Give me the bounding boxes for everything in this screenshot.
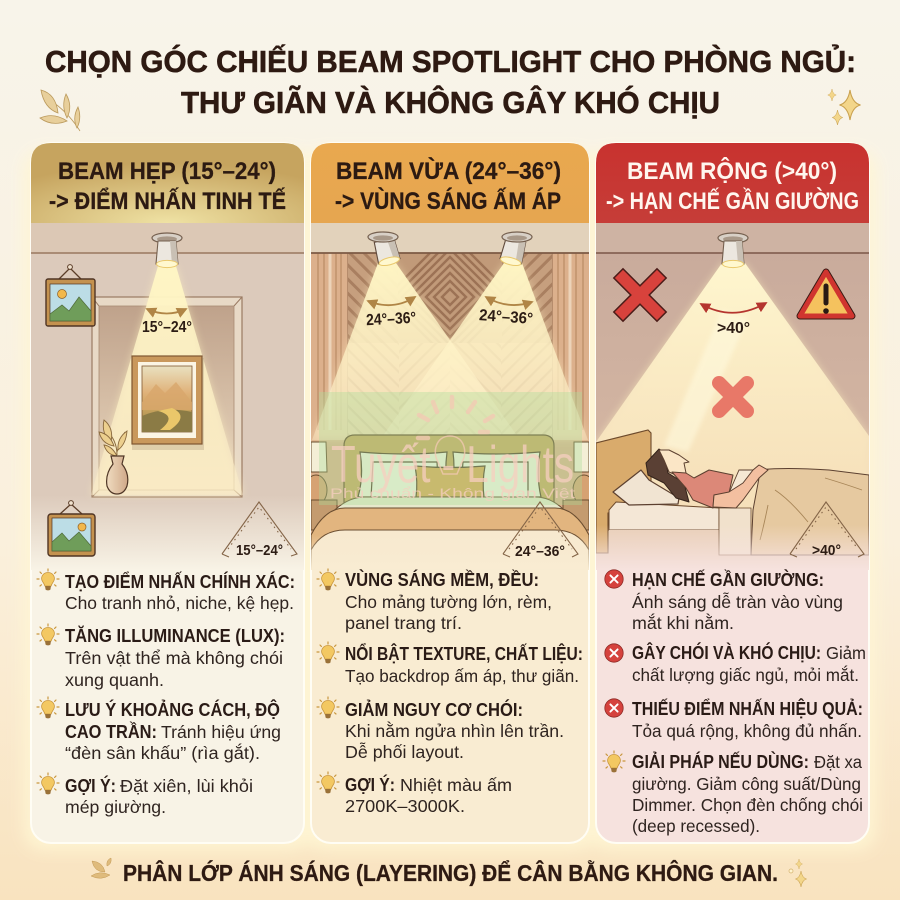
- angle label right: 24°–36°: [479, 307, 534, 328]
- bullet: near bed: mắt khi nằm.: [632, 612, 734, 633]
- angle label: narrow: 15°–24°: [142, 319, 192, 336]
- bullet: soft area: Cho mảng tường lớn, rèm,: [345, 592, 552, 612]
- bullet: solution: (deep recessed).: [632, 816, 760, 836]
- wide light beam: [596, 263, 869, 506]
- wall niche: [92, 297, 242, 497]
- bullet: illuminance: Trên vật thể mà không chói: [65, 648, 283, 668]
- bullet: accent: [37, 569, 295, 613]
- watermark band: [319, 392, 582, 505]
- watermark logo: [330, 397, 575, 501]
- bullet: no accent: Tỏa quá rộng, không đủ nhấn.: [632, 721, 862, 741]
- watermark logo: Tuyết - Lights: [331, 436, 574, 494]
- header: narrow beam: [31, 143, 304, 223]
- header: narrow beam: -> ĐIỂM NHẤN TINH TẾ: [49, 187, 286, 215]
- bullet: soft area: [317, 569, 552, 633]
- ruler triangle: wide: [790, 502, 864, 559]
- bullet: tip narrow: Đặt xiên, lùi khỏi: [120, 776, 253, 796]
- header: wide beam: BEAM RỘNG (>40°): [627, 157, 837, 185]
- bed headboard: [344, 435, 554, 510]
- mattress: [609, 502, 719, 560]
- bullet: distance: [37, 697, 281, 763]
- illustration: person in bed under wide beam: [596, 223, 869, 570]
- spotlight: [718, 233, 748, 268]
- bedside lamp left: [311, 442, 338, 530]
- title: THƯ GIÃN VÀ KHÔNG GÂY KHÓ CHỊU: [181, 84, 720, 120]
- bullet: near bed: HẠN CHẾ GẦN GIƯỜNG:: [632, 569, 824, 590]
- bullet: tip medium: 2700K–3000K.: [345, 796, 465, 816]
- icon: picture bottom: [48, 501, 95, 556]
- icon: leaf sprig: [40, 90, 80, 131]
- header: narrow beam: BEAM HẸP (15°–24°): [58, 158, 276, 185]
- bullet: tip narrow: GỢI Ý:: [65, 775, 116, 796]
- bullet: solution: GIẢI PHÁP NẾU DÙNG:: [632, 751, 809, 772]
- panel: medium beam: [305, 143, 595, 843]
- duvet: [311, 497, 589, 570]
- blanket: [751, 468, 869, 555]
- bullet: tip medium: GỢI Ý:: [345, 774, 395, 795]
- bullet: discomfort: [605, 642, 866, 685]
- bullet: solution: [603, 751, 863, 836]
- watermark logo: Phủ chuẩn - Không gian Việt: [330, 485, 575, 501]
- bullet: discomfort: GÂY CHÓI VÀ KHÓ CHỊU:: [632, 642, 821, 663]
- spotlight left: [368, 232, 401, 267]
- beam glow: [91, 266, 243, 495]
- bullet: discomfort: Giảm: [826, 643, 866, 663]
- angle arrow left: [368, 297, 415, 305]
- vase with leaves: [99, 420, 128, 494]
- icon: faded cross: [719, 383, 747, 411]
- icon: red cross left: [623, 278, 657, 312]
- sheet fold: [729, 470, 754, 493]
- bullet: tip medium: Nhiệt màu ấm: [400, 775, 512, 795]
- ruler triangle: medium: 24°–36°: [515, 543, 565, 560]
- light beam left: [312, 263, 520, 440]
- beam glow: [312, 263, 588, 440]
- pillow: [613, 470, 679, 505]
- framed painting: [132, 356, 204, 450]
- illustration: bedroom headboard wall: [305, 223, 595, 570]
- hair: [646, 449, 689, 502]
- pillows: [358, 452, 541, 498]
- bullet: texture: [317, 642, 583, 686]
- ruler triangle: wide: >40°: [812, 542, 841, 559]
- bullet: discomfort: chất lượng giấc ngủ, mỏi mắt.: [632, 664, 859, 685]
- bullet: distance: “đèn sân khấu” (rìa gắt).: [65, 742, 260, 763]
- ruler triangle: narrow: 15°–24°: [236, 542, 283, 559]
- bullet: soft area: VÙNG SÁNG MỀM, ĐỀU:: [345, 569, 539, 590]
- bullet: illuminance: xung quanh.: [65, 670, 164, 690]
- lower sheet: [719, 508, 751, 555]
- icon: footer sparkles: [789, 859, 807, 887]
- header: medium beam: BEAM VỪA (24°–36°): [336, 157, 561, 185]
- ruler triangle: narrow: [222, 502, 297, 559]
- icon: footer leaves: [91, 858, 111, 878]
- bullet: near bed: [605, 569, 843, 633]
- bullet: glare: [317, 697, 564, 762]
- arm: [713, 465, 768, 508]
- bullet: soft area: panel trang trí.: [345, 613, 462, 633]
- bullet: tip medium: [317, 772, 512, 816]
- bullet: texture: Tạo backdrop ấm áp, thư giãn.: [345, 666, 579, 686]
- bullet: distance: LƯU Ý KHOẢNG CÁCH, ĐỘ: [65, 699, 280, 720]
- beam glow: [596, 262, 869, 442]
- title: [45, 43, 856, 120]
- headboard: [596, 430, 651, 553]
- bullet: tip narrow: mép giường.: [65, 797, 166, 817]
- bullet: glare: GIẢM NGUY CƠ CHÓI:: [345, 699, 523, 720]
- icon: sparkles: [828, 89, 860, 125]
- bullet: accent: TẠO ĐIỂM NHẤN CHÍNH XÁC:: [65, 571, 295, 592]
- header: medium beam: -> VÙNG SÁNG ẤM ÁP: [335, 187, 561, 215]
- header: medium beam: [311, 143, 589, 223]
- angle label left: 24°–36°: [366, 310, 416, 329]
- angle label: wide: >40°: [717, 320, 750, 337]
- spotlight right: [499, 232, 532, 267]
- bullet: glare: Dễ phối layout.: [345, 741, 464, 762]
- bullet: tip narrow: [37, 773, 253, 817]
- ruler triangle: medium: [503, 502, 578, 560]
- curtains: [318, 253, 583, 430]
- bullet: distance: CAO TRẦN:: [65, 721, 157, 742]
- angle arrow right: [486, 297, 532, 305]
- bullet: near bed: Ánh sáng dễ tràn vào vùng: [632, 591, 843, 612]
- panel: narrow beam: [31, 143, 304, 843]
- blanket folds: [760, 478, 862, 540]
- face: [659, 450, 689, 475]
- spotlight: [152, 233, 182, 268]
- bullet: solution: Dimmer. Chọn đèn chống chói: [632, 795, 863, 815]
- bullet: illuminance: TĂNG ILLUMINANCE (LUX):: [65, 625, 285, 646]
- bullet: glare: Khi nằm ngửa nhìn lên trần.: [345, 720, 564, 741]
- wall panel: [348, 254, 552, 438]
- panel: wide beam: [596, 143, 869, 843]
- bullet: illuminance: [37, 624, 285, 690]
- light beam right: [380, 263, 588, 440]
- bullet: accent: Cho tranh nhỏ, niche, kệ hẹp.: [65, 593, 294, 613]
- angle arrow: wide: [701, 303, 766, 313]
- bullet: no accent: [605, 698, 863, 741]
- bullet: distance: Tránh hiệu ứng: [161, 722, 281, 742]
- neck and shirt: [672, 470, 733, 508]
- angle arrow: narrow: [147, 309, 186, 314]
- light beam: [91, 266, 243, 495]
- icon: warning triangle: [800, 272, 852, 316]
- illustration: artwork niche: [31, 223, 304, 570]
- bullet: texture: NỔI BẬT TEXTURE, CHẤT LIỆU:: [345, 643, 583, 664]
- icon: picture top: [46, 265, 95, 326]
- panel glows: [24, 150, 876, 850]
- bullet: solution: Đặt xa: [814, 752, 862, 772]
- bedside lamp right: [562, 442, 589, 530]
- bullet: no accent: THIẾU ĐIỂM NHẤN HIỆU QUẢ:: [632, 698, 863, 719]
- footer note: PHÂN LỚP ÁNH SÁNG (LAYERING) ĐỂ CÂN BẰNG KHÔNG GIAN.: [123, 859, 778, 886]
- title: CHỌN GÓC CHIẾU BEAM SPOTLIGHT CHO PHÒNG NGỦ:: [45, 43, 856, 79]
- beam on face: [664, 310, 748, 452]
- bullet: solution: giường. Giảm công suất/Dùng: [632, 774, 861, 794]
- header: wide beam: [596, 143, 869, 223]
